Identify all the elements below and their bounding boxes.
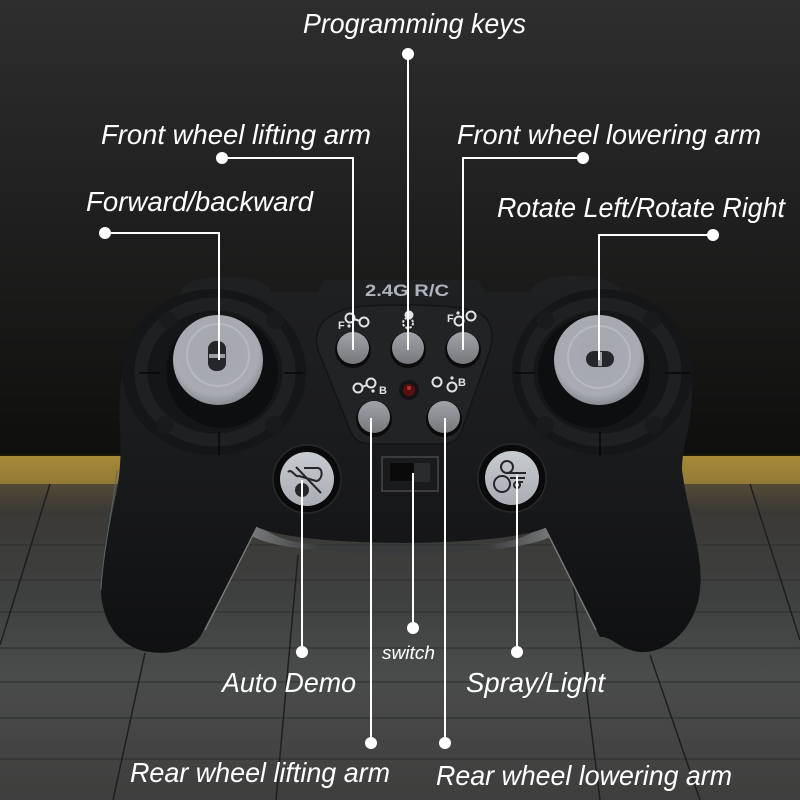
callout: front wheel lowering arm: Front wheel lowering arm — [457, 119, 761, 150]
LED indicator — [399, 380, 419, 400]
button: auto demo — [273, 445, 341, 513]
callout: programming keys — [303, 8, 526, 350]
callout: auto demo: Auto Demo — [220, 667, 356, 698]
translucent lower trim — [252, 524, 552, 554]
right joystick assembly — [512, 289, 692, 456]
controller — [101, 276, 701, 653]
brand text: 2.4G R/C: 2.4G R/C — [365, 281, 449, 300]
icon: B lift: B — [379, 385, 387, 397]
callout: forward/backward: Forward/backward — [86, 186, 314, 217]
callout: spray/light: Spray/Light — [466, 667, 606, 698]
callout: front wheel lifting arm: Front wheel lifting arm — [101, 119, 371, 150]
callout: forward/backward — [86, 186, 314, 360]
icon: F lower: F — [447, 313, 454, 325]
icon: programming gear — [403, 310, 414, 328]
callout: rear wheel lifting arm: Rear wheel lifting arm — [130, 757, 390, 788]
controller body — [101, 276, 701, 653]
callout: rear wheel lowering arm: Rear wheel lowering arm — [436, 760, 732, 791]
slide switch — [382, 457, 438, 491]
icon: F lift: F — [338, 320, 345, 332]
button: rear wheel lowering arm — [426, 376, 466, 437]
button: front wheel lowering arm — [445, 311, 481, 368]
button: programming keys — [390, 310, 426, 368]
callout: auto demo — [220, 480, 356, 698]
joystick cap — [554, 315, 644, 405]
callout: front wheel lowering arm — [457, 119, 761, 350]
callout: rear wheel lowering arm — [436, 418, 732, 791]
callout: switch: switch — [382, 643, 435, 663]
callout: rotate left/rotate right — [497, 192, 786, 360]
button: rear wheel lifting arm — [354, 378, 392, 437]
button: spray/light — [478, 444, 546, 512]
left joystick assembly — [122, 289, 306, 455]
callout: programming keys: Programming keys — [303, 8, 526, 39]
joystick cap — [173, 315, 263, 405]
icon: auto demo crossed — [288, 467, 322, 496]
callout: rotate left/rotate right: Rotate Left/Rotate Right — [497, 192, 786, 223]
center faceplate — [317, 305, 492, 444]
callout: rear wheel lifting arm — [130, 418, 390, 788]
callout: switch — [382, 473, 435, 663]
button: front wheel lifting arm — [335, 314, 371, 368]
icon: spray and light — [494, 461, 526, 492]
callout: spray/light — [466, 475, 606, 698]
callout: front wheel lifting arm — [101, 119, 371, 350]
icon: B lower: B — [458, 377, 466, 389]
